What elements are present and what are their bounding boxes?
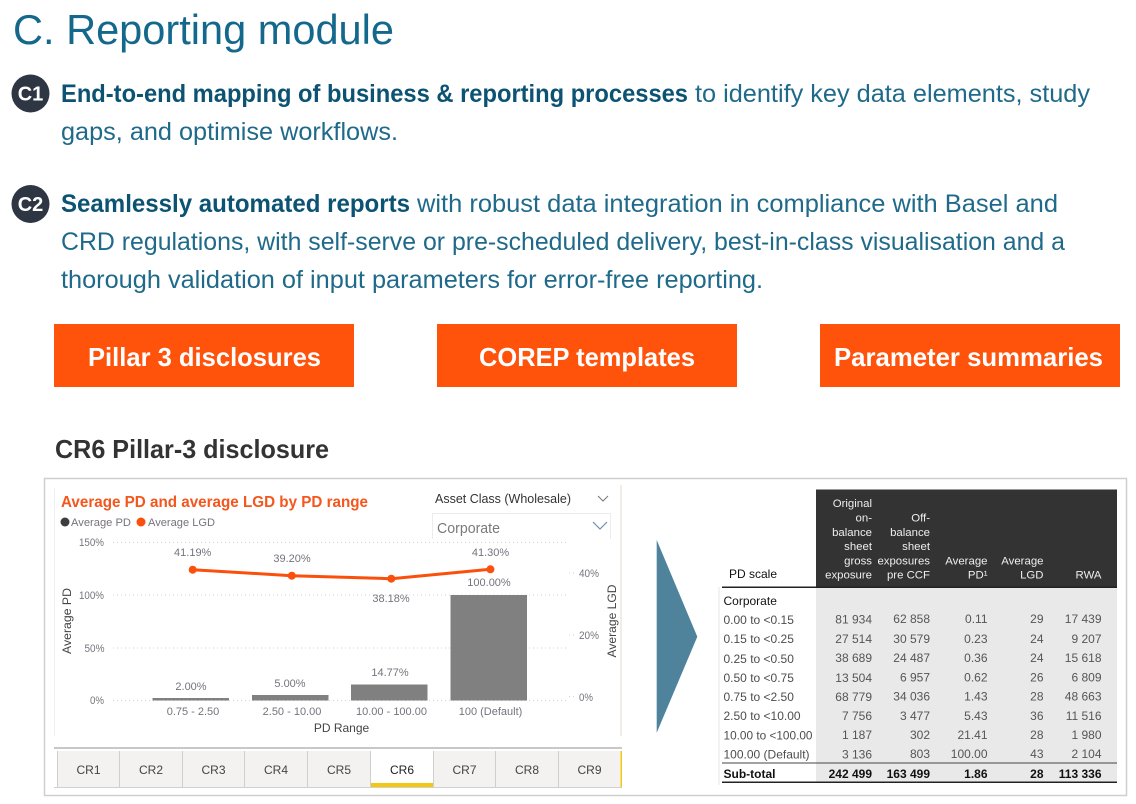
table header: exposures — [877, 556, 930, 568]
row Sub-total: 113 336 — [1059, 767, 1102, 781]
data labels: 39.20% — [273, 553, 311, 565]
item C1 — [12, 74, 1090, 146]
table header: sheet — [902, 541, 931, 553]
text: C2 description — [61, 190, 1065, 294]
tab bar: CR4 — [264, 763, 288, 777]
row 0.25 to <0.50: 15 618 — [1065, 651, 1102, 665]
row 0.00 to <0.15: 29 — [1030, 612, 1044, 626]
row 0.15 to <0.25 — [724, 632, 1102, 646]
row Sub-total: 242 499 — [829, 767, 872, 781]
table header: RWA — [1076, 570, 1102, 582]
panel: Power BI dashboard — [54, 485, 622, 788]
row 0.00 to <0.15: 62 858 — [893, 612, 930, 626]
row Sub-total — [724, 767, 1102, 781]
row 0.50 to <0.75: 6 957 — [900, 670, 930, 684]
row 10.00 to <100.00: 1 187 — [842, 728, 872, 742]
axis title: PD Range: PD Range — [314, 721, 370, 735]
text: C1 description — [61, 80, 1090, 146]
table header: LGD — [1020, 570, 1044, 582]
row 0.75 to <2.50: 68 779 — [835, 690, 872, 704]
icon: C2 badge: C2 — [18, 194, 43, 216]
tab bar — [54, 747, 622, 788]
right axis labels: 40% — [579, 568, 599, 580]
row 100.00 (Default): 803 — [910, 747, 930, 761]
right axis labels: 0% — [579, 692, 593, 704]
bars: average PD — [152, 595, 527, 700]
row 0.25 to <0.50: 0.36 — [964, 651, 988, 665]
item C2 — [12, 185, 1065, 294]
panel: CR6 table — [718, 490, 1117, 785]
icon: C2 badge — [12, 185, 50, 223]
row Sub-total: 163 499 — [887, 767, 930, 781]
row 0.75 to <2.50: 34 036 — [893, 690, 930, 704]
table header: gross — [844, 556, 872, 568]
row 10.00 to <100.00 — [724, 728, 1102, 742]
icon: C1 badge: C1 — [18, 84, 43, 106]
table header: balance — [832, 527, 872, 539]
tab bar: CR6 — [390, 763, 414, 777]
text: C1 description: gaps, and optimise workflows. — [61, 118, 398, 146]
table header: Original — [833, 498, 872, 510]
row 100.00 (Default): 100.00 — [951, 747, 988, 761]
filter: asset class — [432, 492, 610, 539]
row 2.50 to <10.00: 3 477 — [900, 709, 930, 723]
table header: PD¹ — [968, 570, 988, 582]
data labels: 100.00% — [467, 577, 511, 589]
row 10.00 to <100.00: 10.00 to <100.00 — [724, 728, 813, 742]
row 10.00 to <100.00: 21.41 — [957, 728, 988, 742]
table header: Average — [945, 556, 988, 568]
panel: dashboard and table frame — [44, 478, 1126, 796]
left axis labels: 0% — [90, 695, 104, 707]
row 0.00 to <0.15 — [724, 612, 1102, 627]
legend: Average PD — [71, 517, 131, 529]
row 0.00 to <0.15: 17 439 — [1065, 612, 1102, 626]
row 0.15 to <0.25: 0.23 — [964, 632, 988, 646]
gridlines — [113, 542, 574, 700]
row 2.50 to <10.00: 36 — [1030, 709, 1044, 723]
line: average LGD — [189, 565, 494, 583]
left axis labels: 150% — [79, 537, 104, 549]
row 0.75 to <2.50: 0.75 to <2.50 — [724, 690, 794, 704]
row Sub-total: 1.86 — [964, 767, 988, 781]
row 0.75 to <2.50: 1.43 — [964, 690, 988, 704]
data labels: 38.18% — [372, 593, 410, 605]
tab bar: CR1 — [76, 763, 101, 777]
row 10.00 to <100.00: 302 — [910, 728, 930, 742]
row 0.75 to <2.50: 48 663 — [1065, 690, 1102, 704]
x axis labels: 10.00 - 100.00 — [356, 706, 427, 718]
row 100.00 (Default): 43 — [1030, 747, 1044, 761]
data labels: 41.30% — [472, 547, 509, 559]
icon: C1 badge — [12, 74, 50, 112]
row 0.15 to <0.25: 9 207 — [1071, 632, 1102, 646]
chart frame edges — [54, 485, 621, 736]
text: C1 description: End-to-end mapping of business & reporting processes — [61, 80, 688, 108]
row 2.50 to <10.00: 2.50 to <10.00 — [724, 709, 801, 723]
text: C2 description: with robust data integration in compliance with Basel and — [416, 190, 1058, 218]
table header: exposure — [825, 570, 872, 582]
row 10.00 to <100.00: 28 — [1030, 728, 1044, 742]
row 0.00 to <0.15: 0.00 to <0.15 — [724, 613, 794, 627]
tab bar: CR5 — [327, 763, 351, 777]
table header: Off- — [911, 512, 930, 524]
table header: balance — [890, 527, 930, 539]
button: Pillar 3 disclosures: Pillar 3 disclosures — [88, 342, 321, 372]
row 2.50 to <10.00: 11 516 — [1066, 709, 1102, 723]
row 0.15 to <0.25: 27 514 — [835, 632, 872, 646]
row 0.00 to <0.15: 0.11 — [965, 612, 988, 626]
row 0.50 to <0.75: 26 — [1030, 670, 1044, 684]
data labels: 14.77% — [371, 667, 409, 679]
row 0.25 to <0.50: 24 487 — [893, 651, 930, 665]
data labels: 5.00% — [274, 678, 306, 690]
button: Parameter summaries: Parameter summaries — [834, 342, 1103, 372]
row Sub-total: Sub-total — [724, 767, 776, 781]
row 0.25 to <0.50 — [724, 651, 1102, 666]
table header: pre CCF — [887, 570, 930, 582]
button: Pillar 3 disclosures — [54, 324, 354, 387]
x axis labels — [167, 706, 522, 718]
row 0.75 to <2.50: 28 — [1030, 690, 1044, 704]
text: C2 description: thorough validation of input parameters for error-free reporting. — [61, 266, 763, 294]
left axis labels: 100% — [79, 590, 104, 602]
right axis labels — [579, 568, 599, 704]
section label: Corporate: Corporate — [724, 594, 777, 608]
row 100.00 (Default): 3 136 — [842, 748, 872, 762]
data labels: 41.19% — [174, 547, 212, 559]
arrow — [657, 540, 697, 733]
tab bar: CR9 — [577, 763, 602, 777]
x axis labels: 100 (Default) — [459, 706, 522, 718]
table header: PD scale — [729, 567, 777, 581]
row 0.50 to <0.75: 13 504 — [835, 671, 872, 685]
row 100.00 (Default): 100.00 (Default) — [724, 748, 810, 762]
filter: asset class: Corporate — [437, 520, 500, 537]
axis title: Average LGD: Average LGD — [605, 584, 619, 657]
row 100.00 (Default) — [724, 747, 1102, 762]
row 0.50 to <0.75: 6 809 — [1071, 670, 1102, 684]
legend: Average LGD — [148, 517, 215, 529]
text: C2 description: Seamlessly automated reports — [61, 190, 410, 218]
row Sub-total: 28 — [1030, 767, 1044, 781]
table background — [718, 490, 1117, 785]
row 0.75 to <2.50 — [724, 690, 1102, 704]
title: C. Reporting module — [13, 6, 394, 53]
table header — [729, 498, 1102, 582]
text: C2 description: CRD regulations, with self-serve or pre-scheduled delivery, best-in-class visualisation and a — [61, 228, 1065, 256]
legend — [60, 517, 215, 529]
left axis labels: 50% — [84, 643, 105, 655]
button: COREP templates — [437, 324, 737, 387]
data labels — [174, 547, 511, 693]
button: COREP templates: COREP templates — [479, 342, 695, 372]
row 10.00 to <100.00: 1 980 — [1071, 728, 1102, 742]
x axis labels: 2.50 - 10.00 — [263, 706, 321, 718]
row 0.15 to <0.25: 0.15 to <0.25 — [724, 632, 794, 646]
row 0.25 to <0.50: 38 689 — [835, 651, 872, 665]
row 0.15 to <0.25: 24 — [1030, 632, 1044, 646]
heading: CR6 Pillar-3 disclosure: CR6 Pillar-3 disclosure — [55, 434, 329, 464]
table header: sheet — [844, 541, 873, 553]
tab bar: CR3 — [201, 763, 226, 777]
tab bar: CR7 — [452, 763, 477, 777]
row 0.25 to <0.50: 0.25 to <0.50 — [724, 652, 794, 666]
row 0.50 to <0.75: 0.50 to <0.75 — [724, 671, 794, 685]
row 0.50 to <0.75: 0.62 — [964, 670, 988, 684]
row 2.50 to <10.00 — [724, 709, 1102, 723]
filter: asset class: Asset Class (Wholesale) — [435, 492, 571, 506]
data labels: 2.00% — [175, 681, 207, 693]
axis title: Average PD: Average PD — [60, 588, 74, 654]
table header: Average — [1001, 556, 1044, 568]
button: Parameter summaries — [820, 324, 1120, 387]
row 0.25 to <0.50: 24 — [1030, 651, 1044, 665]
row 2.50 to <10.00: 5.43 — [964, 709, 988, 723]
row 100.00 (Default): 2 104 — [1071, 747, 1102, 761]
tab bar: CR2 — [139, 763, 163, 777]
x axis labels: 0.75 - 2.50 — [167, 706, 219, 718]
row 0.50 to <0.75 — [724, 670, 1102, 685]
table header: on- — [856, 512, 872, 524]
tab bar: CR8 — [515, 763, 539, 777]
row 0.15 to <0.25: 30 579 — [893, 632, 930, 646]
text: C1 description: to identify key data elements, study — [695, 80, 1090, 108]
row 2.50 to <10.00: 7 756 — [842, 709, 872, 723]
chart title: Average PD and average LGD by PD range — [61, 494, 368, 511]
right axis labels: 20% — [579, 630, 599, 642]
row 0.00 to <0.15: 81 934 — [835, 612, 872, 626]
left axis labels — [79, 537, 105, 707]
